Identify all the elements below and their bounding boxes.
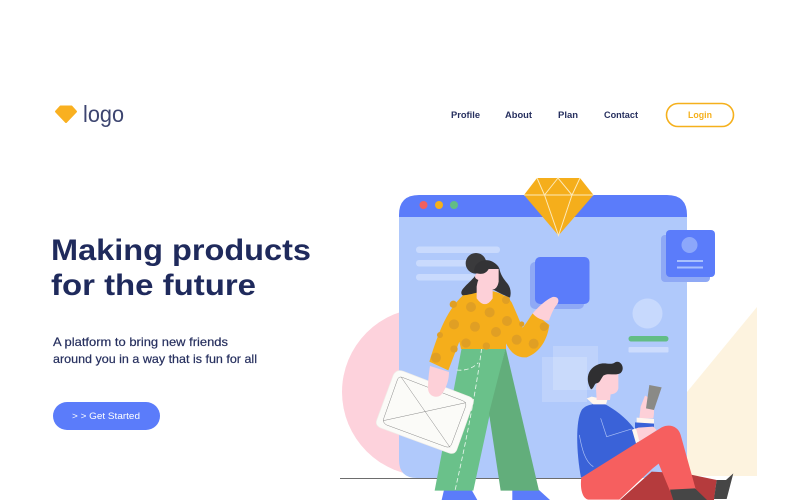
get started button xyxy=(53,402,160,430)
red front leg xyxy=(581,426,696,500)
hair fringe xyxy=(474,260,499,274)
description text xyxy=(53,335,257,366)
dark green leg xyxy=(489,348,539,491)
envelope card xyxy=(376,371,473,453)
nav: Contact: Contact xyxy=(604,110,639,121)
face xyxy=(596,373,618,400)
pants xyxy=(435,348,550,500)
pink circle backdrop xyxy=(342,308,510,476)
heading: for the future xyxy=(51,269,256,302)
arm and hand xyxy=(639,396,654,418)
icon: large diamond xyxy=(524,178,594,236)
raised hand xyxy=(533,297,558,320)
light circle xyxy=(632,298,662,328)
phone xyxy=(646,385,662,410)
hair back xyxy=(461,268,511,298)
hair bun xyxy=(466,253,486,274)
collar xyxy=(587,397,607,404)
heading: Making products xyxy=(51,234,311,267)
front shoe xyxy=(670,488,707,500)
neck and face xyxy=(475,267,499,304)
woman figure xyxy=(376,253,558,500)
ground line xyxy=(340,478,582,479)
blue shoes xyxy=(442,490,550,500)
nav: About: About xyxy=(505,110,533,121)
blue sweater xyxy=(577,403,640,478)
shirt cuff and wrist xyxy=(632,427,657,443)
window header xyxy=(399,195,687,217)
get started button: > > Get Started xyxy=(72,411,140,422)
window body xyxy=(399,215,687,478)
sweater xyxy=(429,290,549,370)
stitching xyxy=(455,348,482,491)
cuff xyxy=(637,418,654,424)
white shirt cuff xyxy=(632,428,639,443)
description text: A platform to bring new friends xyxy=(53,335,228,349)
rear shoe xyxy=(714,473,733,499)
text placeholder lines xyxy=(416,246,500,280)
login button xyxy=(666,104,734,126)
sweater seams xyxy=(579,418,632,467)
login button: Login xyxy=(688,110,712,121)
description text: around you in a way that is fun for all xyxy=(53,352,257,366)
light bar xyxy=(628,347,668,352)
sleeve end xyxy=(635,422,654,430)
green bar xyxy=(628,336,668,342)
profile card xyxy=(661,230,715,282)
logo wordmark: logo xyxy=(83,101,124,127)
icon: logo diamond xyxy=(56,106,76,122)
window control dots xyxy=(420,201,458,209)
navigation xyxy=(451,110,639,121)
heading xyxy=(51,234,311,302)
dark red back leg xyxy=(620,472,717,500)
light green leg xyxy=(435,348,506,491)
translucent squares xyxy=(542,346,598,402)
sweater dots xyxy=(431,296,548,363)
hair xyxy=(588,362,623,389)
blue content square xyxy=(530,257,590,309)
upper body xyxy=(429,253,558,370)
man figure xyxy=(577,362,733,500)
nav: Profile: Profile xyxy=(451,110,480,121)
browser window xyxy=(399,195,687,478)
nav: Plan: Plan xyxy=(558,110,578,121)
logo xyxy=(56,101,124,127)
cream triangle backdrop xyxy=(687,307,757,476)
lower hand xyxy=(428,366,449,397)
